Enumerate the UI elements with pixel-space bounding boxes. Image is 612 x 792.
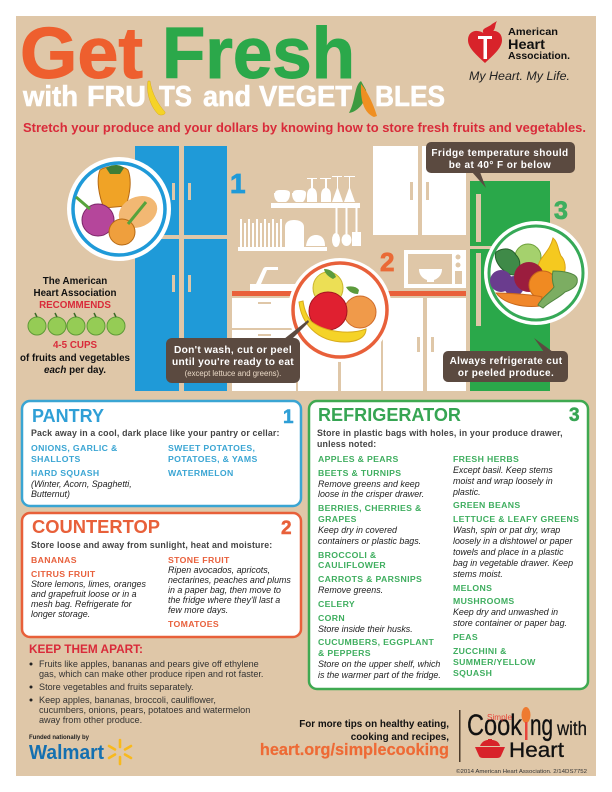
panel: countertop: and grapefruit loose or in a [31, 589, 137, 599]
title [20, 14, 355, 94]
funder: Walmart [29, 734, 131, 764]
panel: refrigerator: GRAPES [318, 514, 357, 524]
callout: fridge temperature: be at 40° F or below [449, 160, 551, 171]
recommendation block: RECOMMENDS [39, 300, 111, 311]
panel: countertop: longer storage. [31, 609, 90, 619]
panel: refrigerator: CAULIFLOWER [318, 560, 386, 570]
tagline: Stretch your produce and your dollars by knowing how to store fresh fruits and vegetables. [23, 121, 586, 135]
title: Fresh [162, 14, 355, 94]
panel: refrigerator: REFRIGERATOR [318, 404, 461, 425]
panel: pantry: 1 [283, 407, 294, 428]
panel: pantry: SHALLOTS [31, 454, 81, 464]
panel: refrigerator: SQUASH [453, 668, 492, 678]
icon: apples [28, 313, 125, 335]
American Heart Association logo: My Heart. My Life. [469, 69, 570, 83]
recommendation block: 4-5 CUPS [53, 340, 98, 351]
panel: countertop: mesh bag. Refrigerate for [31, 599, 133, 609]
icon: banana [147, 81, 165, 115]
callout: refrigerate cut produce: Always refrigerate cut [450, 356, 563, 367]
plate 3: refrigerator produce [484, 221, 588, 325]
dish shelves [238, 176, 361, 251]
panel: pantry: SWEET POTATOES, [168, 443, 255, 453]
panel: refrigerator: Except basil. Keep stems [453, 465, 553, 475]
keep them apart: cucumbers, onions, pears, potatoes and watermelon [39, 705, 250, 715]
panel: refrigerator: MUSHROOMS [453, 596, 515, 606]
panel: countertop: BANANAS [31, 555, 77, 565]
panel: refrigerator: is the warmer part of the fridge. [318, 670, 441, 680]
Simple Cooking with Heart logo: ng [530, 709, 553, 742]
panel: refrigerator: Keep dry in covered [318, 525, 398, 535]
panel: refrigerator: CARROTS & PARSNIPS [318, 574, 422, 584]
panel: pantry: POTATOES, & YAMS [168, 454, 258, 464]
panel: refrigerator: ZUCCHINI & [453, 646, 507, 656]
panel: refrigerator: Store inside their husks. [318, 624, 413, 634]
pantry cabinet [135, 146, 227, 391]
Simple Cooking with Heart logo [459, 707, 587, 762]
callout: don't wash: (except lettuce and greens). [185, 369, 281, 378]
panel: refrigerator: MELONS [453, 583, 492, 593]
subtitle: BLES [375, 81, 445, 113]
keep them apart: Fruits like apples, bananas and pears give off ethylene [39, 659, 259, 669]
keep them apart: away from other produce. [39, 715, 142, 725]
panel: refrigerator: PEAS [453, 632, 478, 642]
panel: countertop: Store loose and away from sunlight, heat and moisture: [31, 540, 272, 550]
panel: countertop: STONE FRUIT [168, 555, 230, 565]
panel: refrigerator: plastic. [452, 487, 481, 497]
recommendation block: Heart Association [34, 288, 116, 299]
callout: don't wash [166, 320, 309, 383]
panel: refrigerator: LETTUCE & LEAFY GREENS [453, 514, 579, 524]
callout: refrigerate cut produce [443, 338, 568, 382]
panel: refrigerator: unless noted: [317, 439, 376, 449]
keep them apart: gas, which can make other produce ripen and rot faster. [39, 669, 263, 679]
panel: refrigerator: Store in plastic bags with holes, in your produce drawer, [317, 428, 563, 438]
panel: pantry: Butternut) [31, 489, 70, 499]
keep them apart: Store vegetables and fruits separately. [39, 682, 194, 692]
panel: refrigerator: bag in vegetable drawer. Keep [453, 558, 573, 568]
panel: countertop: Ripen avocados, apricots, [168, 565, 270, 575]
panel: countertop: the fridge where they'll last a [168, 595, 280, 605]
panel: refrigerator: CUCUMBERS, EGGPLANT [318, 637, 435, 647]
number 1: 1 [230, 168, 246, 199]
panel: refrigerator: loosely in a dishtowel or paper [453, 536, 573, 546]
panel: refrigerator: BEETS & TURNIPS [318, 468, 401, 478]
keep them apart [29, 644, 263, 725]
panel: pantry [22, 401, 301, 506]
panel: countertop: in a paper bag, then move to [168, 585, 281, 595]
callout: fridge temperature [426, 142, 575, 188]
panel: countertop [22, 513, 301, 637]
panel: refrigerator: 3 [569, 405, 580, 426]
panel: refrigerator: & PEPPERS [318, 648, 371, 658]
subtitle: VEGET [259, 81, 353, 113]
more tips text: heart.org/simplecooking [260, 741, 449, 759]
panel: countertop: COUNTERTOP [32, 517, 160, 537]
panel: refrigerator: Remove greens and keep [318, 479, 420, 489]
Simple Cooking with Heart logo: Simple [487, 712, 512, 722]
callout: fridge temperature: Fridge temperature should [431, 148, 569, 159]
recommendation block: of fruits and vegetables [20, 353, 131, 364]
panel: refrigerator: SUMMER/YELLOW [453, 657, 536, 667]
panel: pantry: WATERMELON [168, 468, 234, 478]
panel: countertop: TOMATOES [168, 619, 219, 629]
subtitle: and [203, 81, 251, 113]
callout: refrigerate cut produce: or peeled produce. [458, 368, 554, 379]
panel: refrigerator: containers or plastic bags. [318, 536, 421, 546]
panel: refrigerator: Wash, spin or pat dry, wrap [453, 525, 560, 535]
funder: Walmart: Funded nationally by [29, 734, 89, 741]
panel: countertop: nectarines, peaches and plums [168, 575, 291, 585]
panel: refrigerator: moist and wrap loosely in [453, 476, 553, 486]
recommendation block [20, 276, 131, 376]
panel: pantry: Pack away in a cool, dark place like your pantry or cellar: [31, 428, 280, 438]
upper white cabinets [373, 146, 466, 235]
microwave [404, 250, 466, 288]
callout: don't wash: Don't wash, cut or peel [174, 345, 292, 356]
panel: countertop: Store lemons, limes, oranges [31, 579, 146, 589]
panel: refrigerator: APPLES & PEARS [318, 454, 399, 464]
keep them apart: KEEP THEM APART: [29, 644, 143, 656]
plate 2: countertop produce [288, 258, 392, 362]
more tips text: For more tips on healthy eating, [299, 719, 449, 730]
plate 1: pantry produce [67, 157, 171, 261]
panel: countertop: 2 [281, 518, 292, 539]
panel: refrigerator: towels and place in a plastic [453, 547, 564, 557]
recommendation block: The American [43, 276, 107, 287]
panel: refrigerator: Remove greens. [318, 585, 383, 595]
keep them apart: Keep apples, bananas, broccoli, cauliflower, [39, 695, 216, 705]
panel: pantry: HARD SQUASH [31, 468, 100, 478]
subtitle: FRU [87, 81, 146, 113]
number 2: 2 [380, 247, 394, 277]
more tips text: cooking and recipes, [351, 732, 449, 743]
panel: refrigerator: loose in the crisper drawer. [318, 489, 424, 499]
counter and lower cabinets [232, 267, 466, 391]
American Heart Association logo: Association. [508, 50, 570, 62]
title: Get [20, 14, 143, 94]
Simple Cooking with Heart logo: Cook [467, 709, 523, 742]
refrigerator [470, 181, 550, 391]
American Heart Association logo: Heart [508, 36, 545, 52]
panel: countertop: few more days. [168, 605, 228, 615]
panel: pantry: ONIONS, GARLIC & [31, 443, 118, 453]
subtitle: TS [159, 81, 192, 113]
subtitle: with [22, 81, 78, 113]
icon: pea pod and carrot [349, 81, 377, 117]
funder: Walmart: Walmart [29, 742, 104, 764]
panel: refrigerator: stems moist. [453, 569, 503, 579]
more tips text [260, 719, 449, 759]
panel: countertop: CITRUS FRUIT [31, 569, 96, 579]
panel: refrigerator: GREEN BEANS [453, 500, 521, 510]
panel: refrigerator: FRESH HERBS [453, 454, 519, 464]
panel: refrigerator: CORN [318, 613, 345, 623]
copyright: ©2014 American Heart Association. 2/14DS7752 [456, 768, 587, 775]
panel: refrigerator: BERRIES, CHERRIES & [318, 503, 422, 513]
panel: refrigerator: Store on the upper shelf, which [318, 659, 440, 669]
panel: refrigerator [309, 401, 588, 689]
panel: refrigerator: BROCCOLI & [318, 550, 377, 560]
panel: refrigerator: CELERY [318, 599, 355, 609]
recommendation block: each per day. [44, 365, 106, 376]
panel: refrigerator: Keep dry and unwashed in [453, 607, 558, 617]
Simple Cooking with Heart logo: with [556, 719, 587, 740]
panel: pantry: PANTRY [32, 406, 104, 426]
American Heart Association logo [468, 21, 570, 83]
Simple Cooking with Heart logo: Heart [509, 739, 564, 762]
subtitle [22, 81, 445, 113]
panel: pantry: (Winter, Acorn, Spaghetti, [31, 479, 132, 489]
callout: don't wash: until you're ready to eat [172, 357, 294, 368]
number 3: 3 [554, 197, 568, 225]
panel: refrigerator: store container or paper bag. [453, 618, 567, 628]
American Heart Association logo: American [508, 26, 558, 38]
